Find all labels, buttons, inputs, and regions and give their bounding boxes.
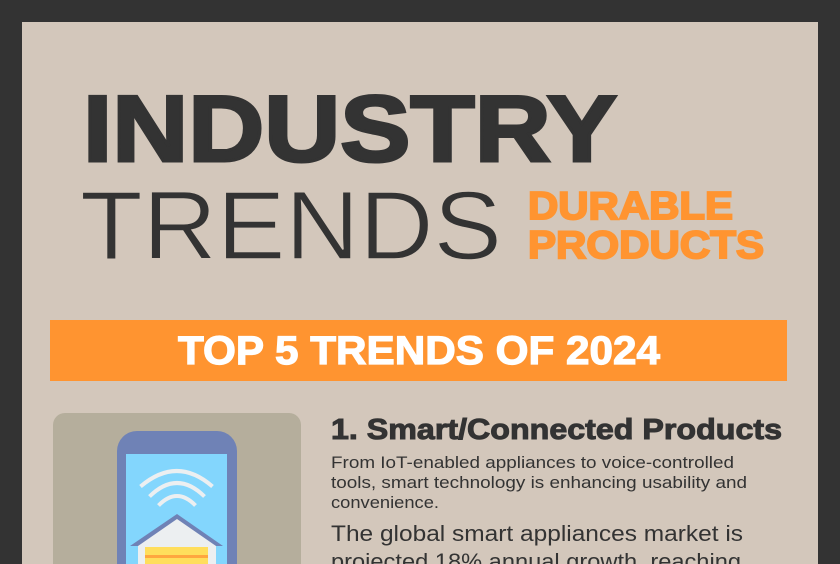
text block: description <box>331 453 747 512</box>
text block: description: tools, smart technology is enhancing usability and <box>331 473 747 492</box>
icon: wifi signal <box>140 471 212 506</box>
text block: description: From IoT-enabled appliances to voice-controlled <box>331 453 734 472</box>
banner: top 5 trends of 2024: TOP 5 TRENDS OF 2024 <box>178 329 661 373</box>
text block: market statistic: The global smart appliances market is <box>331 521 743 546</box>
subtitle: durable products <box>528 185 764 267</box>
icon: smartphone <box>117 431 237 564</box>
heading: smart connected products: 1. Smart/Connected Products <box>331 414 782 446</box>
title: industry: INDUSTRY <box>83 76 617 181</box>
banner: top 5 trends of 2024 <box>50 320 787 381</box>
panel: smart product illustration <box>53 413 301 564</box>
subtitle: durable products: PRODUCTS <box>528 224 764 267</box>
icon: smart home <box>130 514 223 564</box>
card background <box>53 413 301 564</box>
title: trends: TRENDS <box>80 171 502 280</box>
text block: market statistic <box>331 521 743 564</box>
text block: description: convenience. <box>331 493 439 512</box>
subtitle: durable products: DURABLE <box>528 185 733 228</box>
